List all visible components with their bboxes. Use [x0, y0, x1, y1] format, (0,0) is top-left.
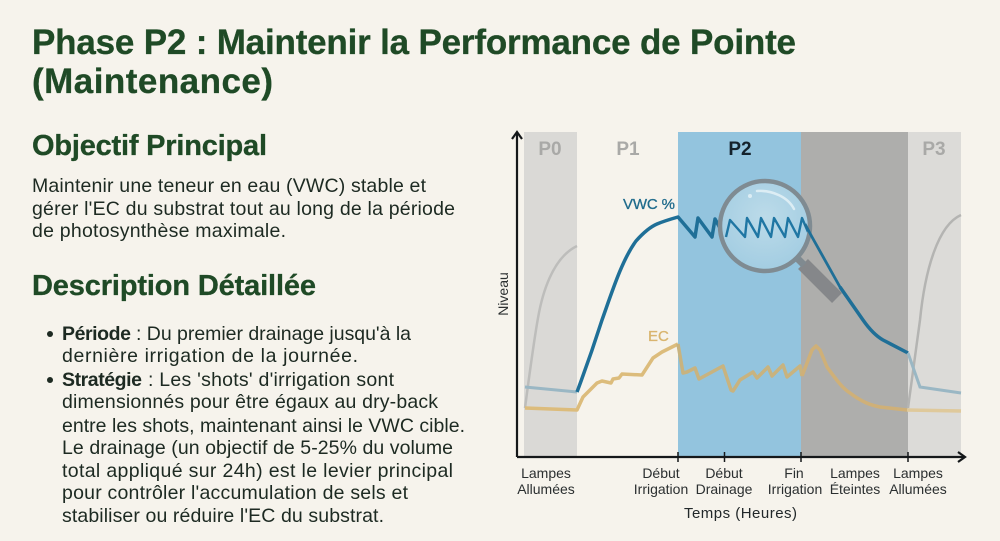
title: (Maintenance) [32, 62, 273, 101]
phase band: P3 [908, 132, 961, 457]
heading: objectif principal: Objectif Principal [32, 130, 267, 162]
bullet list: total appliqué sur 24h) est le levier principal [62, 460, 453, 482]
axis labels: Irrigation [768, 481, 822, 497]
axis labels: Début [642, 465, 680, 481]
curve: grey P0 [525, 246, 577, 408]
axis labels: Irrigation [634, 481, 688, 497]
axis labels: Fin [784, 465, 804, 481]
text block: objectif: de photosynthèse maximale. [32, 220, 286, 242]
curve: VWC [577, 217, 728, 392]
phase labels: P3 [922, 139, 946, 160]
chart [495, 132, 965, 522]
axis labels: Lampes [830, 465, 880, 481]
bullet list [47, 323, 465, 527]
axis labels: Allumées [517, 481, 575, 497]
bullet list: Stratégie [62, 369, 142, 391]
bullet list: dernière irrigation de la journée. [62, 345, 358, 367]
axis labels [517, 465, 947, 497]
bullet list: : Les 'shots' d'irrigation sont [148, 369, 395, 391]
axis labels: Drainage [696, 481, 753, 497]
axis labels: Lampes [893, 465, 943, 481]
label: VWC %: VWC % [623, 196, 675, 213]
curve: VWC P3 [908, 353, 961, 393]
axis labels: Éteintes [830, 481, 880, 497]
phase labels [538, 139, 946, 160]
bullet list: Période [62, 323, 131, 345]
axis labels: Lampes [521, 465, 571, 481]
curve: VWC descending [840, 287, 908, 353]
curve: grey P3 [908, 215, 961, 408]
phase labels: P0 [538, 139, 562, 160]
phase band: P0 [524, 132, 577, 457]
bullet list: stabiliser ou réduire l'EC du substrat. [62, 505, 384, 527]
axis labels: Début [705, 465, 743, 481]
phase labels: P1 [616, 139, 640, 160]
phase band: night [801, 132, 908, 457]
phase labels: P2 [728, 139, 752, 160]
axis labels: Allumées [889, 481, 947, 497]
icon: magnifying glass [720, 181, 837, 298]
text block: objectif: Maintenir une teneur en eau (VWC) stable et [32, 175, 427, 197]
text block: objectif: gérer l'EC du substrat tout au long de la période [32, 198, 455, 220]
bullet list: entre les shots, maintenant ainsi le VWC cible. [62, 415, 465, 437]
text block: objectif [32, 175, 455, 242]
title: Phase P2 : Maintenir la Performance de Pointe [32, 23, 796, 62]
bullet list: : Du premier drainage jusqu'à la [136, 323, 411, 345]
heading: description détaillée: Description Détaillée [32, 270, 316, 302]
title [32, 23, 796, 101]
bullet list: dimensionnés pour être égaux au dry-back [62, 391, 438, 413]
axes [512, 132, 965, 462]
curve tail over magnifier [805, 224, 846, 296]
bullet list: pour contrôler l'accumulation de sels et [62, 482, 409, 504]
curve: EC [525, 344, 961, 411]
bullet list: Le drainage (un objectif de 5-25% du volume [62, 437, 453, 459]
label: EC: EC [648, 328, 669, 345]
phase band: P2 [678, 132, 801, 457]
axis title: Niveau: Niveau [495, 272, 511, 316]
curve: VWC left grey-blue [525, 387, 577, 392]
axis title: Temps: Temps (Heures) [684, 505, 797, 522]
